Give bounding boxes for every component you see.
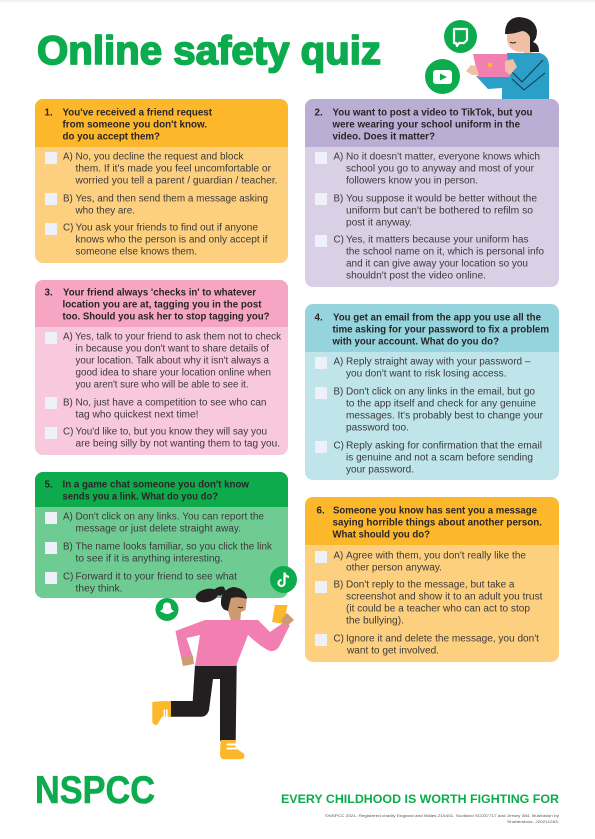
answers <box>63 152 278 258</box>
answers <box>334 152 545 282</box>
logo: NSPCC: NSPCC <box>35 769 155 812</box>
question 4 header <box>305 304 559 352</box>
answers: C) <box>334 440 344 452</box>
answers <box>63 331 281 449</box>
answers: the bullying). <box>346 616 404 627</box>
question 1 text <box>44 108 213 142</box>
question 1 text: do you accept them? <box>62 132 160 142</box>
copyright note: Shutterstock. J20211263. <box>507 819 559 824</box>
answers: (it could be a teacher who can act to stop <box>346 604 531 615</box>
answers <box>334 356 544 476</box>
answers: they think. <box>76 583 122 594</box>
question 2 text <box>314 108 533 142</box>
question 4 text: time asking for your password to fix a problem <box>332 324 549 335</box>
answers: other person anyway. <box>346 562 442 573</box>
answers: A) <box>334 356 343 367</box>
answers: Yes, it matters because your uniform has <box>346 234 529 246</box>
answers: password too. <box>346 422 409 433</box>
answers: C) <box>63 571 73 582</box>
answers: A) <box>334 152 343 162</box>
question 1 header <box>35 99 288 147</box>
answers: is genuine and not a scam before sending <box>346 452 533 464</box>
answers: Ignore it and delete the message, you don't <box>346 633 539 644</box>
answers: Don't reply to the message, but take a <box>346 580 515 591</box>
question 2 text: You want to post a video to TikTok, but you <box>332 108 533 118</box>
icon: video app circle <box>425 59 460 94</box>
answers: your location. Talk about why it isn't always a <box>76 355 270 366</box>
question 2 text: 2. <box>314 108 323 118</box>
question 3 text <box>44 288 270 322</box>
answers: Don't click on any links in the email, but go <box>346 386 536 397</box>
question 3 text: Your friend always 'checks in' to whatever <box>63 288 256 298</box>
answers: and it can give away your location so you <box>346 258 528 270</box>
answers: No, just have a competition to see who can <box>76 397 266 408</box>
answer checkboxes <box>45 332 57 439</box>
answers: Yes, talk to your friend to ask them not to check <box>75 331 281 342</box>
panel: question 6 <box>305 497 559 662</box>
answers: Don't click on any links. You can report the <box>76 511 265 522</box>
answers: B) <box>63 541 73 552</box>
answers: the school name on it, which is personal info <box>346 246 545 258</box>
answers: screenshot and show it to an adult you trust <box>346 592 543 603</box>
copyright note: ©NSPCC 2021. Registered charity England and Wales 216401. Scotland SC037717 and Jersey 384. Illustration by <box>325 813 559 818</box>
answers: followers know you in person. <box>346 176 478 186</box>
question 5 text: In a game chat someone you don't know <box>62 479 249 490</box>
answers: school you go to anyway and most of your <box>346 164 535 174</box>
answers: post it anyway. <box>346 218 412 228</box>
answers: tag who quickest next time! <box>76 409 198 420</box>
question 6 text: What should you do? <box>332 529 430 540</box>
question 3 text: too. Should you ask her to stop tagging you? <box>62 312 270 322</box>
answers: in because you don't want to share details of <box>76 343 269 354</box>
answers: You'd like to, but you know they will say you <box>76 426 267 437</box>
answers: want to get involved. <box>346 645 439 656</box>
answers: The name looks familiar, so you click the link <box>76 541 272 552</box>
answer checkboxes <box>315 152 327 247</box>
answers: knows who the person is and only accept if <box>76 234 268 246</box>
answers: C) <box>334 234 344 246</box>
answers: worried you tell a parent / guardian / teacher. <box>74 176 278 186</box>
panel: question 4 <box>305 304 559 480</box>
panel: question 2 <box>305 99 559 287</box>
answers: message or just delete straight away. <box>76 523 241 534</box>
illustration: running girl with phone and app icons <box>152 566 297 759</box>
answers: B) <box>334 580 343 591</box>
answers <box>334 550 543 656</box>
question 5 text: 5. <box>44 479 53 490</box>
question 1 text: from someone you don't know. <box>62 120 207 130</box>
answers: Yes, and then send them a message asking <box>76 194 268 204</box>
question 4 text: You get an email from the app you use all the <box>333 312 542 323</box>
answers: good idea to share your location online when <box>76 367 271 378</box>
answer checkboxes <box>45 152 57 235</box>
question 6 text: 6. <box>316 505 325 516</box>
answers: messages. It's probably best to change your <box>346 410 544 421</box>
answers: B) <box>63 397 73 408</box>
question 6 text: Someone you know has sent you a message <box>333 505 538 516</box>
question 5 text <box>44 479 249 502</box>
question 4 text <box>314 312 549 347</box>
answers: you aren't sure who will be able to see it. <box>76 379 248 390</box>
illustration: woman with laptop and app icons <box>425 17 549 99</box>
copyright note <box>325 813 559 824</box>
icon: Snapchat circle <box>156 598 178 621</box>
answers: them. If it's made you feel uncomfortable or <box>76 164 272 174</box>
answers: A) <box>63 511 73 522</box>
answers: Agree with them, you don't really like the <box>346 550 527 561</box>
answers: Reply asking for confirmation that the email <box>346 440 542 452</box>
question 5 header <box>35 472 288 507</box>
question 3 header <box>35 280 288 327</box>
panel: question 5 <box>35 472 288 598</box>
question 2 header <box>305 99 559 147</box>
answers: your password. <box>346 464 414 476</box>
answers: who they are. <box>74 206 135 216</box>
answers: No, you decline the request and block <box>76 152 244 162</box>
question 5 text: sends you a link. What do you do? <box>62 491 218 502</box>
answers: uniform but can't be bothered to refilm so <box>346 206 534 216</box>
question 2 text: were wearing your school uniform in the <box>332 120 521 130</box>
answers: someone else knows them. <box>76 246 197 258</box>
answers: you don't want to risk losing access. <box>346 368 506 379</box>
girl figure <box>152 586 294 759</box>
panel: question 3 <box>35 280 288 455</box>
answers <box>63 511 272 594</box>
question 2 text: video. Does it matter? <box>332 132 435 142</box>
answers: C) <box>63 222 73 234</box>
answers: Forward it to your friend to see what <box>76 571 237 582</box>
question 1 text: 1. <box>44 108 53 118</box>
answers: You suppose it would be better without the <box>346 194 538 204</box>
question 6 text <box>316 505 542 540</box>
answers: Reply straight away with your password – <box>346 356 531 367</box>
icon: TikTok circle <box>270 566 297 593</box>
answers: to the app itself and check for any genuine <box>346 398 537 409</box>
question 6 text: saying horrible things about another person. <box>332 517 542 528</box>
title: Online safety quiz <box>37 29 381 73</box>
answers: B) <box>334 386 343 397</box>
icon: chat app circle <box>444 20 477 53</box>
answers: A) <box>334 550 343 561</box>
answers: to see if it is anything interesting. <box>76 553 223 564</box>
answers: B) <box>63 194 73 204</box>
question 4 text: with your account. What do you do? <box>332 336 499 347</box>
tagline: EVERY CHILDHOOD IS WORTH FIGHTING FOR <box>281 794 560 806</box>
answer checkboxes <box>315 551 327 646</box>
woman figure <box>466 17 549 99</box>
answers: are being silly by not wanting them to tag you. <box>76 438 280 449</box>
answers: C) <box>334 633 344 644</box>
answers: A) <box>63 152 73 162</box>
question 3 text: location you are at, tagging you in the post <box>62 300 262 310</box>
answer checkboxes <box>45 512 57 584</box>
answers: No it doesn't matter, everyone knows which <box>346 152 540 162</box>
question 1 text: You've received a friend request <box>62 108 213 118</box>
panel: question 1 <box>35 99 288 263</box>
answers: shouldn't post the video online. <box>346 270 486 282</box>
question 3 text: 3. <box>44 288 53 298</box>
answers: You ask your friends to find out if anyone <box>76 222 259 234</box>
question 4 text: 4. <box>314 312 323 323</box>
question 6 header <box>305 497 559 545</box>
answers: B) <box>334 194 343 204</box>
answers: C) <box>63 426 73 437</box>
answer checkboxes <box>315 357 327 453</box>
answers: A) <box>63 331 73 342</box>
